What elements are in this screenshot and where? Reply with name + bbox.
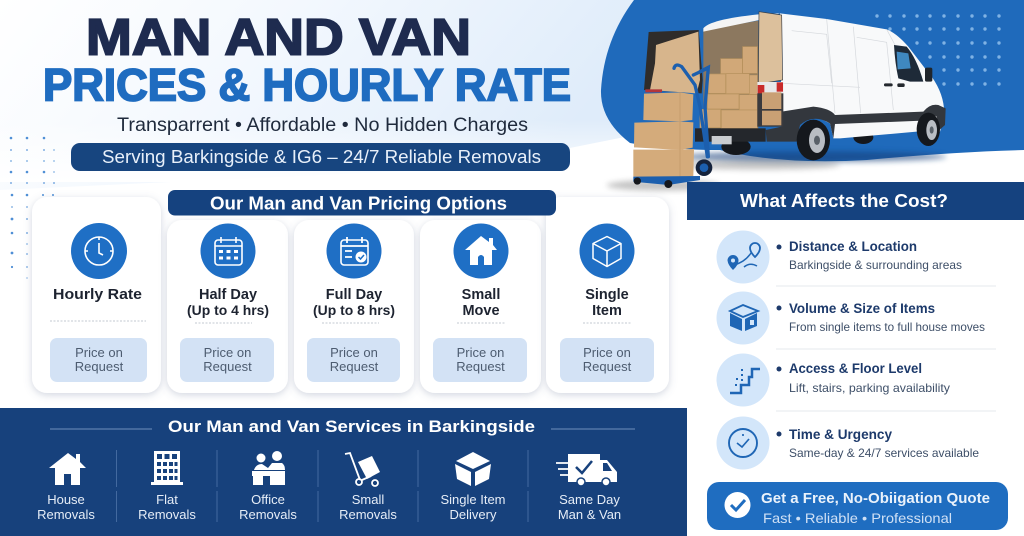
pricing heading (168, 190, 556, 216)
van photo illustration (607, 12, 947, 191)
van body (780, 13, 945, 138)
factor: volume: From single items to full house moves (789, 320, 985, 334)
service: flat removals (138, 451, 196, 522)
price: Request (203, 359, 252, 374)
icon: building (151, 451, 183, 485)
factor: access: Access & Floor Level (789, 361, 922, 376)
service: office removals: Removals (239, 507, 297, 522)
hero blue shape (601, 0, 1024, 161)
title (43, 8, 571, 110)
panel: pricing options (32, 197, 669, 393)
service: small removals (339, 453, 397, 522)
rear quarter and lights (757, 82, 783, 94)
factor: time: Same-day & 24/7 services available (789, 446, 979, 460)
bumper (695, 128, 766, 142)
service: same day man and van: Man & Van (558, 507, 621, 522)
icon: calendar check (326, 224, 382, 278)
pricing heading: Our Man and Van Pricing Options (210, 194, 507, 214)
service: office removals: Office (251, 492, 285, 507)
service: flat removals: Removals (138, 507, 196, 522)
front wheel (917, 113, 940, 146)
call to action (707, 482, 1008, 530)
panel: what affects the cost (687, 182, 1024, 530)
factor: volume (716, 292, 985, 344)
card: half day: (Up to 4 hrs) (187, 303, 269, 318)
service: office removals (239, 451, 297, 522)
factor: access (716, 354, 950, 406)
price: Price on (75, 345, 123, 360)
moving boxes on trolley (633, 92, 694, 180)
call to action: Get a Free, No-Obiigation Quote (761, 490, 990, 507)
factor: time (716, 416, 979, 470)
price (560, 338, 654, 382)
label: Full Day (326, 287, 382, 303)
service: flat removals: Flat (156, 492, 178, 507)
location pill (71, 143, 570, 171)
side window (894, 45, 923, 82)
service: single item delivery (440, 452, 506, 522)
card: full day (294, 220, 414, 393)
card: hourly rate (32, 197, 161, 393)
open left door (644, 30, 703, 93)
price: Request (330, 359, 379, 374)
price: Price on (204, 345, 251, 360)
icon: hand truck (345, 453, 380, 486)
service: single item delivery: Delivery (450, 507, 497, 522)
lower black trim (766, 105, 946, 142)
card: single item (546, 197, 669, 393)
title line 2: PRICES & HOURLY RATE (43, 60, 571, 110)
call to action: Fast • Reliable • Professional (763, 510, 952, 526)
price: Request (456, 359, 505, 374)
price: Price on (330, 345, 378, 360)
label: Single (585, 287, 629, 303)
services heading: Our Man and Van Services in Barkingside (168, 417, 535, 436)
stacked boxes in van (700, 47, 757, 128)
service: same day man and van (556, 454, 621, 522)
dot pattern: hero (875, 14, 1001, 86)
cargo interior (703, 21, 758, 130)
icon: delivery van (556, 454, 617, 486)
factor: volume: Volume & Size of Items (789, 301, 935, 316)
cost heading: What Affects the Cost? (740, 190, 948, 211)
door handles (884, 83, 893, 86)
price (180, 338, 274, 382)
label: Half Day (199, 287, 257, 303)
service: house removals: House (47, 492, 85, 507)
icon: calendar (200, 224, 256, 278)
icon: parcel (455, 452, 491, 486)
service: single item delivery: Single Item (440, 492, 506, 507)
mirror (925, 68, 932, 82)
card: full day: (Up to 8 hrs) (313, 303, 395, 318)
factor: time: Time & Urgency (789, 427, 892, 442)
rear wheel (797, 120, 830, 160)
dot pattern: left (10, 137, 55, 279)
card: small move (420, 220, 541, 393)
service: same day man and van: Same Day (559, 492, 620, 507)
factor: distance: Distance & Location (789, 239, 917, 254)
service: house removals: Removals (37, 507, 95, 522)
factor: access: Lift, stairs, parking availability (789, 381, 950, 395)
open right door (758, 12, 783, 84)
price (433, 338, 527, 382)
icon: box (716, 292, 770, 344)
factor: distance: Barkingside & surrounding areas (789, 258, 962, 272)
card: half day (167, 220, 288, 393)
title line 1: MAN AND VAN (86, 8, 471, 66)
panel lines (782, 19, 895, 113)
icon: clock (71, 223, 127, 279)
icon: clock check (716, 416, 770, 470)
label: Hourly Rate (53, 287, 142, 303)
ground shadow (607, 180, 720, 191)
icon: office desk (252, 451, 285, 485)
price: Price on (583, 345, 631, 360)
icon: house (454, 224, 508, 278)
icon: cube (580, 224, 634, 278)
service: small removals: Small (352, 492, 384, 507)
location pill: Serving Barkingside & IG6 – 24/7 Reliable Removals (102, 147, 541, 167)
price (307, 338, 400, 382)
icon: house (49, 453, 86, 485)
panel: services (0, 408, 687, 536)
tagline: Transparrent • Affordable • No Hidden Charges (117, 114, 528, 136)
price (50, 338, 147, 382)
service: house removals (37, 453, 95, 522)
icon: stairs (716, 354, 770, 406)
icon: check (724, 492, 750, 518)
cost heading (687, 182, 1024, 220)
price: Price on (457, 345, 504, 360)
service: small removals: Removals (339, 507, 397, 522)
icon: route (716, 230, 770, 284)
label: Small (462, 287, 500, 303)
price: Request (583, 359, 632, 374)
price: Request (75, 359, 124, 374)
factor: distance (716, 230, 962, 284)
hand truck (674, 65, 708, 157)
far wheels (721, 138, 751, 155)
card: single item: Item (592, 303, 622, 319)
card: small move: Move (462, 303, 500, 319)
